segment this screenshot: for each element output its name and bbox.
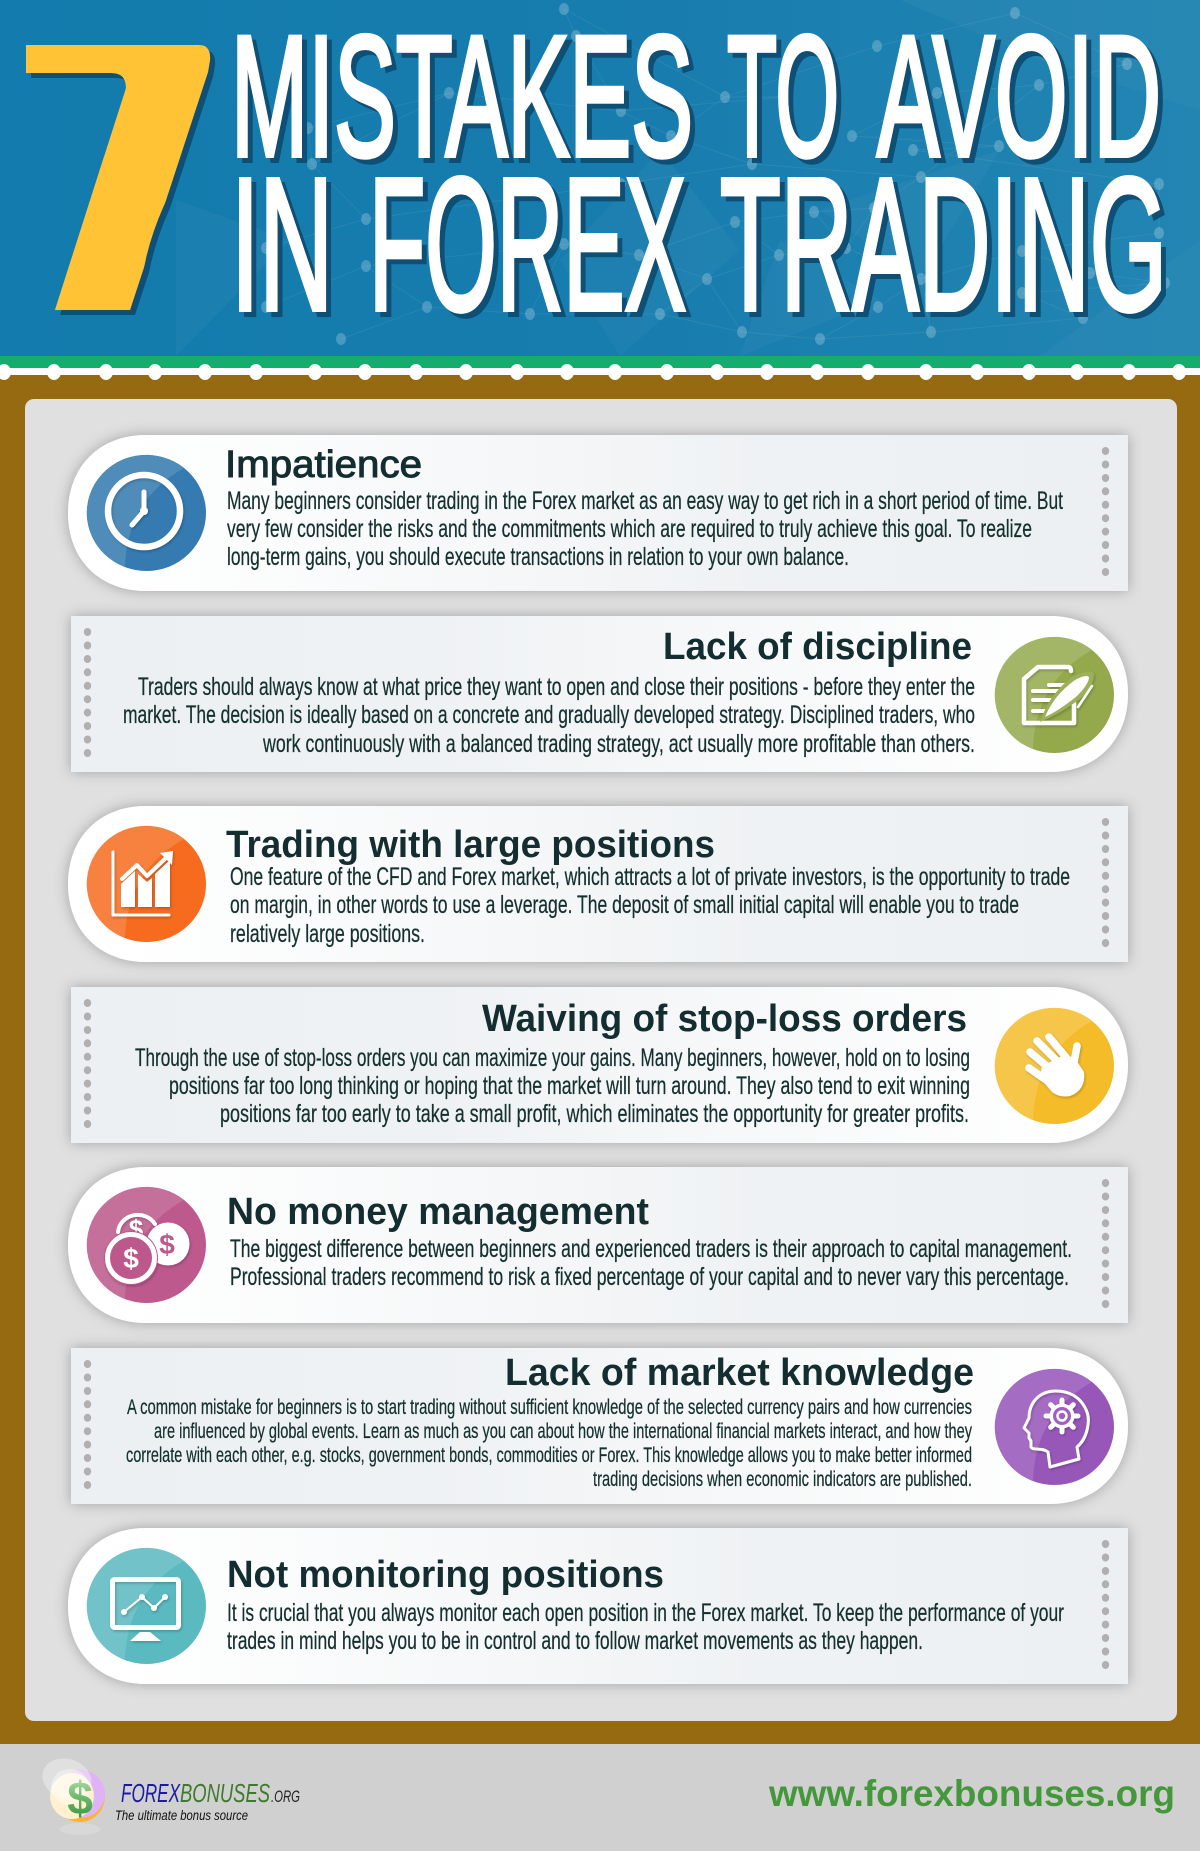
heading: No money management bbox=[227, 1191, 649, 1233]
heading: Lack of market knowledge bbox=[505, 1352, 974, 1394]
logo mark: $ bbox=[67, 1772, 93, 1824]
card: Not monitoring positions bbox=[68, 1528, 1128, 1684]
header background bbox=[0, 0, 1200, 356]
body text bbox=[227, 1599, 1064, 1655]
body text bbox=[230, 1235, 1072, 1291]
title: FOREX bbox=[369, 140, 686, 350]
card: Trading with large positions bbox=[68, 806, 1128, 962]
stitched band bbox=[0, 356, 1200, 1744]
icon: coins: $ bbox=[129, 1214, 144, 1244]
main panel bbox=[25, 399, 1177, 1721]
body text bbox=[123, 673, 975, 758]
body text bbox=[135, 1044, 970, 1128]
card: Impatience bbox=[68, 435, 1128, 591]
heading: Lack of discipline bbox=[663, 626, 972, 668]
body text: relatively large positions. bbox=[230, 920, 425, 948]
body text bbox=[126, 1396, 972, 1491]
title bbox=[231, 0, 1167, 350]
logo wordmark: .ORG bbox=[271, 1787, 300, 1806]
icon: coins: $ bbox=[159, 1229, 175, 1260]
icon: monitor bbox=[87, 1548, 206, 1664]
icon: document and pen bbox=[995, 637, 1114, 753]
heading: Not monitoring positions bbox=[227, 1554, 664, 1596]
icon: rising chart bbox=[87, 826, 206, 942]
icon: coins bbox=[87, 1187, 206, 1303]
logo wordmark bbox=[115, 1778, 300, 1823]
heading: Trading with large positions bbox=[226, 824, 715, 866]
icon: head with gear bbox=[995, 1369, 1114, 1485]
body text bbox=[230, 863, 1070, 948]
title: TO bbox=[727, 0, 839, 192]
card: No money management bbox=[68, 1167, 1128, 1323]
icon: coins: $ bbox=[123, 1243, 139, 1274]
heading: Waiving of stop-loss orders bbox=[482, 998, 967, 1040]
footer band bbox=[0, 1744, 1200, 1851]
logo wordmark: BONUSES bbox=[180, 1778, 270, 1808]
icon: hand bbox=[995, 1008, 1114, 1124]
card: Waiving of stop-loss orders bbox=[71, 987, 1128, 1143]
title: IN bbox=[231, 140, 333, 350]
title: MISTAKES bbox=[231, 0, 693, 192]
logo wordmark: FOREX bbox=[121, 1778, 181, 1808]
icon: clock bbox=[87, 455, 206, 571]
body text: trading decisions when economic indicators are published. bbox=[593, 1468, 972, 1491]
website url: www.forexbonuses.org bbox=[768, 1773, 1175, 1814]
body text bbox=[227, 487, 1063, 571]
logo mark bbox=[37, 1752, 105, 1835]
card: Lack of market knowledge bbox=[71, 1348, 1128, 1504]
body text: long-term gains, you should execute transactions in relation to your own balance. bbox=[227, 543, 849, 571]
card: Lack of discipline bbox=[71, 616, 1128, 772]
heading: Impatience bbox=[225, 444, 422, 486]
body text: trades in mind helps you to be in control and to follow market movements as they happen. bbox=[227, 1627, 923, 1655]
logo wordmark: The ultimate bonus source bbox=[115, 1807, 248, 1823]
